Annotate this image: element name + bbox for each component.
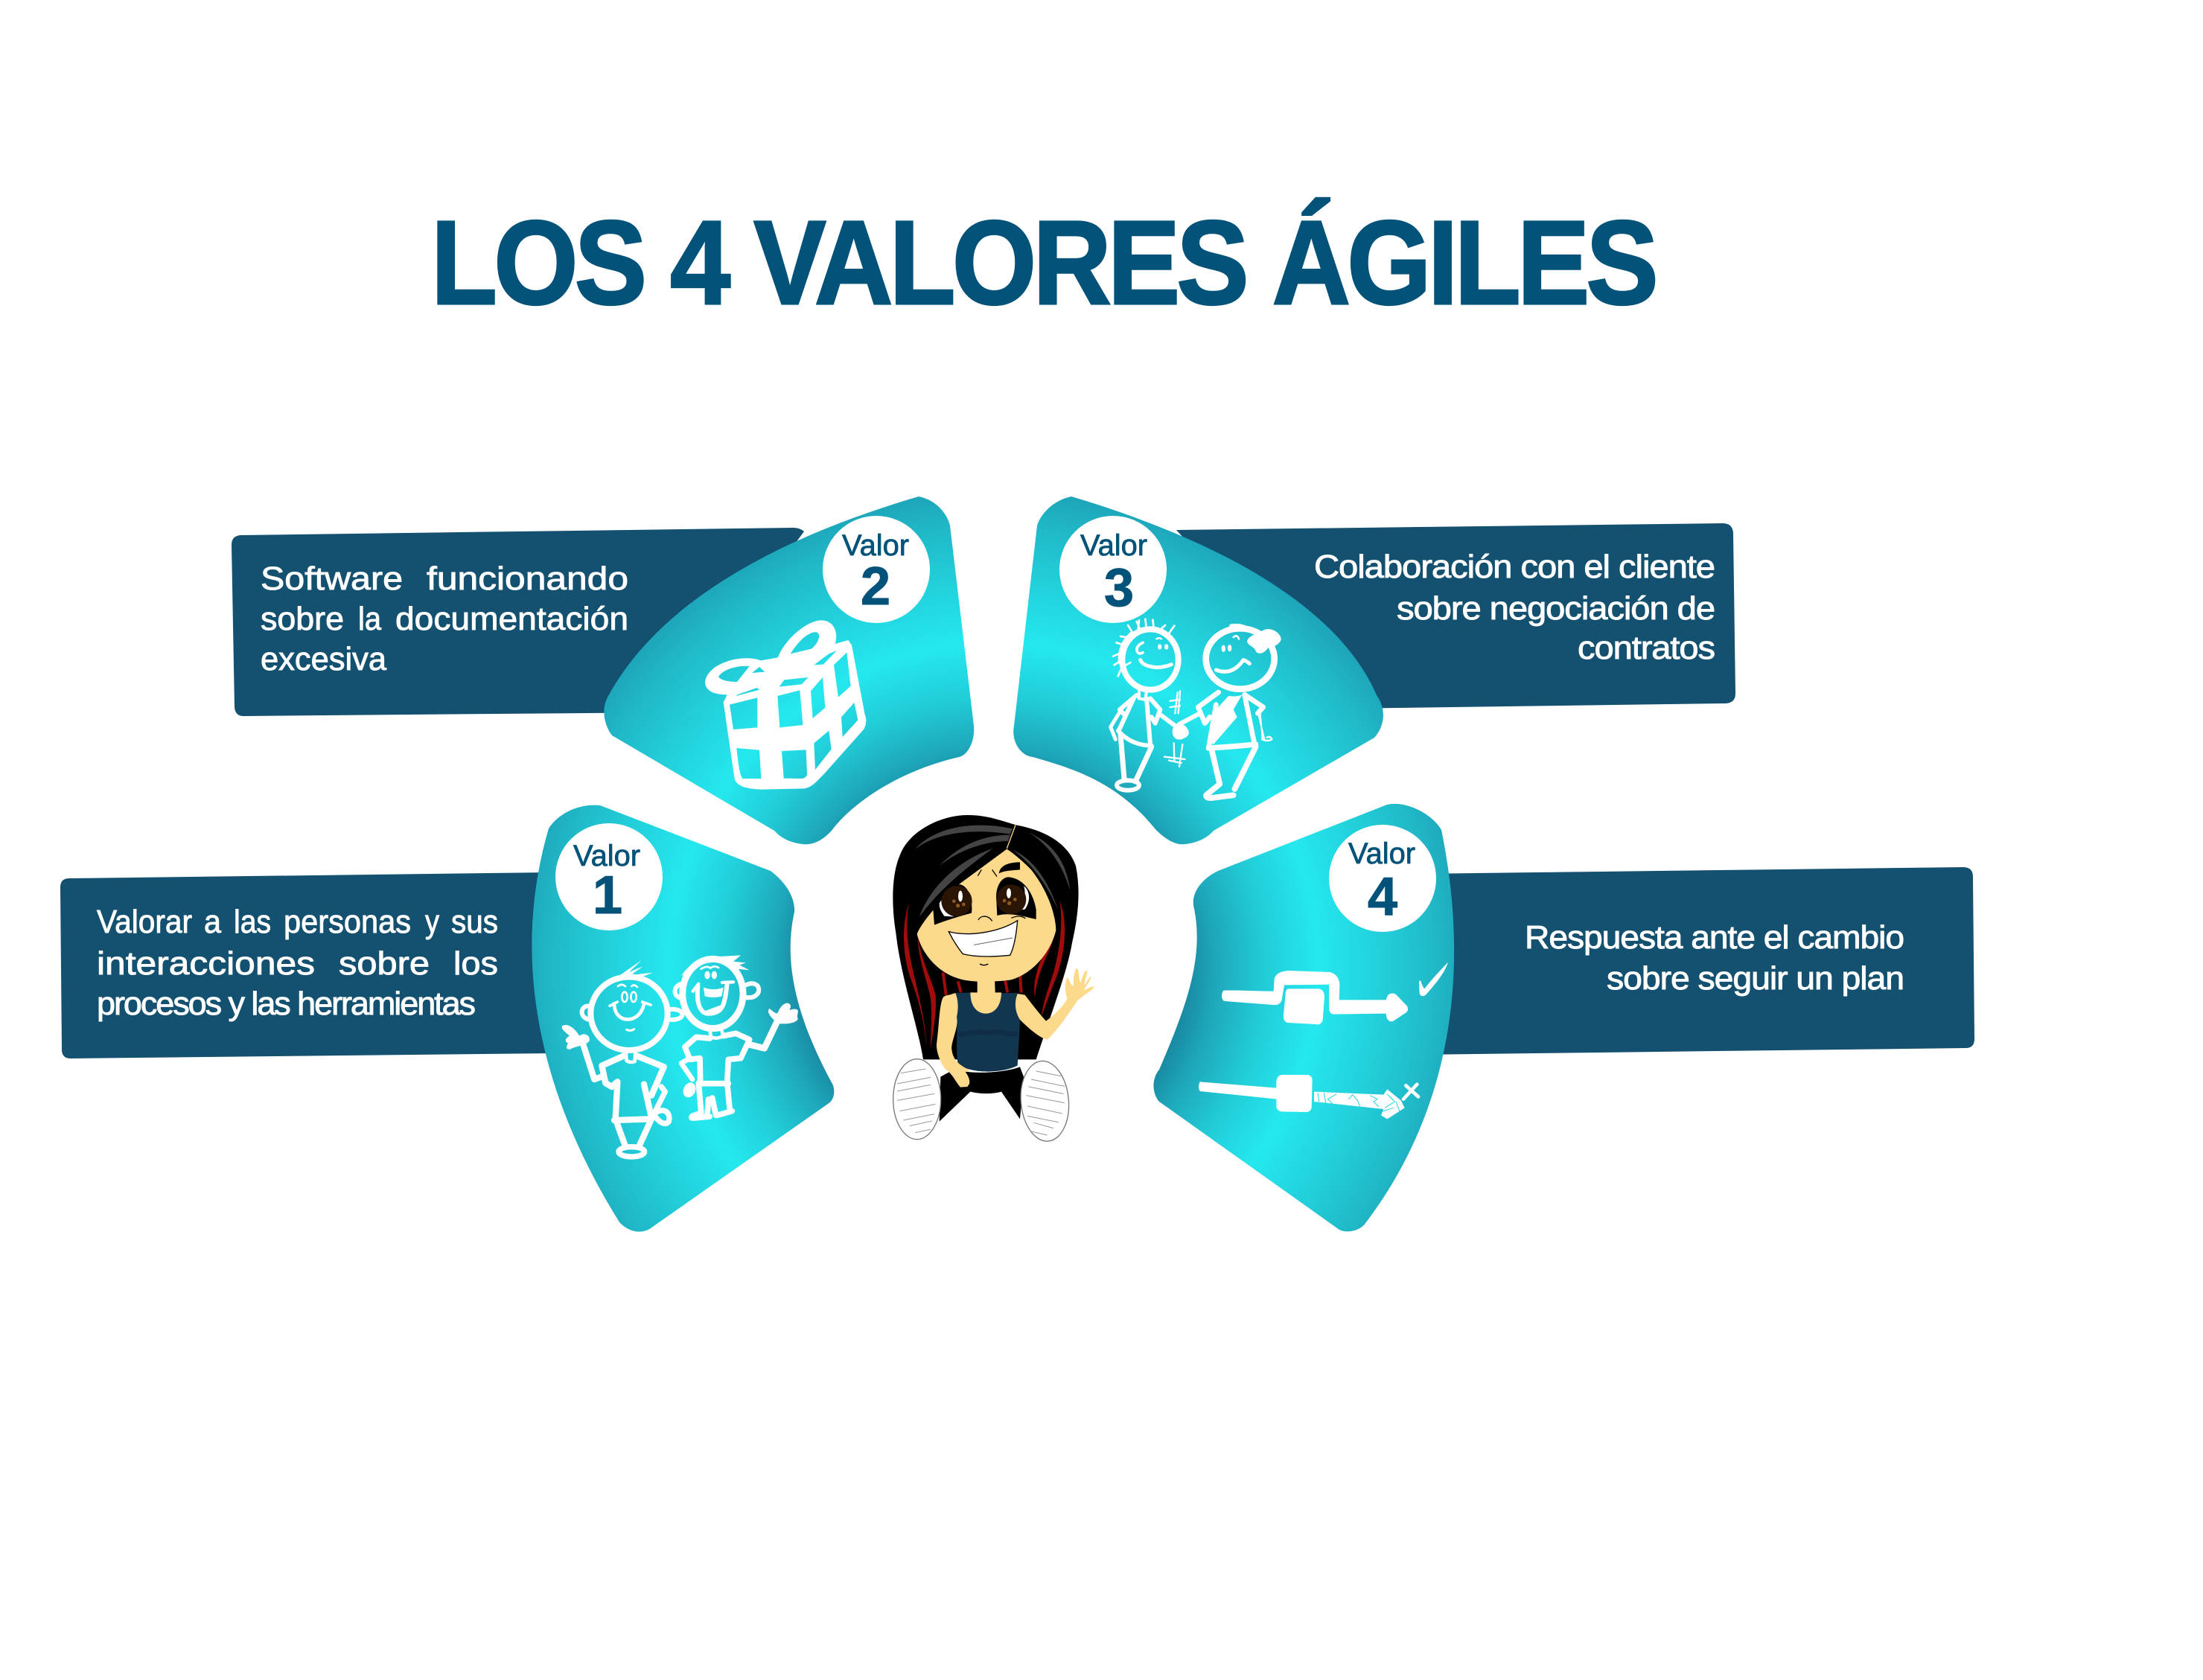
panel: valor 1 <box>60 805 834 1232</box>
text: valor 4 description: Respuesta ante el cambio <box>1525 919 1904 956</box>
badge: valor 4: Valor <box>1348 837 1415 870</box>
badge: valor 4 <box>1329 825 1436 932</box>
text: valor 2 description: excesiva <box>261 641 387 677</box>
text: valor 2 description <box>261 560 628 677</box>
badge: valor 2 <box>823 516 930 623</box>
shape: valor 3 segment <box>1013 496 1383 844</box>
badge: valor 1: 1 <box>593 866 622 925</box>
text: valor 3 description: Colaboración con el cliente <box>1314 549 1715 585</box>
badge: valor 2: 2 <box>861 557 890 616</box>
text: valor 1 description <box>97 904 498 1022</box>
icon: two smiling children <box>562 955 798 1157</box>
text: valor 1 description: procesos y las herramientas <box>97 986 475 1022</box>
icon: detour arrow and broken arrow <box>1199 962 1448 1119</box>
text: valor 3 description: contratos <box>1578 630 1715 666</box>
text: valor 2 description: la <box>358 601 381 637</box>
shape: valor 2 segment <box>604 496 974 844</box>
title: LOS 4 VALORES ÁGILES <box>431 196 1655 329</box>
skin: neck and arms <box>937 968 1094 1087</box>
icon: two people shaking hands <box>1111 619 1281 798</box>
text bar: valor 4 <box>1415 867 1974 1055</box>
text: valor 1 description: sus <box>451 904 498 940</box>
badge: valor 1 <box>555 823 663 930</box>
badge: valor 4: 4 <box>1368 867 1397 927</box>
text: valor 3 description <box>1314 549 1715 666</box>
badge: valor 3: 3 <box>1104 558 1134 618</box>
text bar: valor 3 <box>1176 523 1735 709</box>
text bar: valor 2 <box>232 528 804 716</box>
text: valor 4 description: sobre seguir un plan <box>1607 960 1904 997</box>
panel: valor 4 <box>1153 804 1974 1231</box>
badge: valor 1: Valor <box>573 840 640 872</box>
hair <box>893 815 1079 1059</box>
text: valor 1 description: a <box>204 904 221 940</box>
text: valor 2 description: documentación <box>395 601 628 637</box>
panel: valor 2 <box>232 496 974 844</box>
badge: valor 3: Valor <box>1080 529 1147 562</box>
text: valor 1 description: interacciones <box>97 945 315 982</box>
text: valor 2 description: funcionando <box>427 560 628 597</box>
shape: valor 1 segment <box>532 805 834 1232</box>
text: valor 1 description: los <box>453 945 498 982</box>
badge: valor 2: Valor <box>842 529 909 562</box>
text: valor 1 description: y <box>425 904 439 940</box>
text: valor 1 description: personas <box>284 904 411 940</box>
panel: valor 3 <box>1013 496 1735 844</box>
tank top <box>955 992 1020 1072</box>
legs <box>940 1067 1024 1122</box>
shoes <box>893 1059 1072 1143</box>
text: valor 2 description: Software <box>261 560 403 597</box>
text: valor 3 description: sobre negociación de <box>1397 590 1715 627</box>
face <box>917 849 1056 982</box>
badge: valor 3 <box>1059 516 1167 623</box>
character: waving girl with black and red hair <box>893 815 1094 1143</box>
text: valor 1 description: sobre <box>339 945 430 982</box>
text: valor 4 description <box>1525 919 1904 997</box>
icon: gift box <box>705 620 866 790</box>
text: valor 1 description: Valorar <box>97 904 192 940</box>
shape: valor 4 segment <box>1153 804 1454 1231</box>
text: valor 2 description: sobre <box>261 601 344 637</box>
text: valor 1 description: las <box>234 904 271 940</box>
text bar: valor 1 <box>60 872 555 1058</box>
